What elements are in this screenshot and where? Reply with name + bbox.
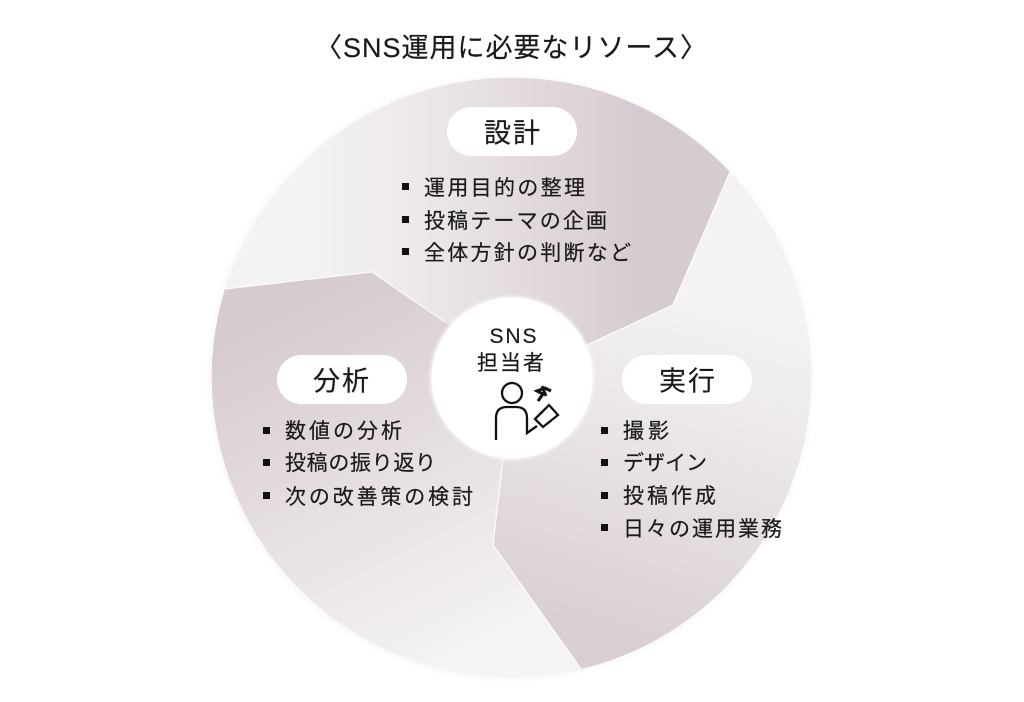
circular diagram bbox=[209, 76, 813, 680]
panel: 設計 bbox=[402, 107, 631, 265]
list: 分析 bbox=[263, 420, 473, 509]
segment dividers bbox=[225, 172, 730, 669]
title: 〈SNS運用に必要なリソース〉 bbox=[315, 33, 707, 63]
pill heading: 実行 bbox=[622, 355, 752, 404]
pill heading: 分析: 分析 bbox=[313, 366, 369, 396]
panel: 実行 bbox=[601, 355, 782, 541]
icon: person with smartphone bbox=[496, 383, 558, 440]
list: 分析: 次の改善策の検討 bbox=[285, 486, 473, 509]
pill heading: 実行: 実行 bbox=[659, 366, 715, 396]
panel: center SNS担当者 bbox=[430, 296, 594, 460]
segment: 分析 bbox=[212, 272, 581, 677]
list: 分析: 投稿の振り返り bbox=[285, 452, 436, 475]
list: 設計: 運用目的の整理 bbox=[424, 177, 585, 200]
panel: 分析 bbox=[263, 355, 473, 509]
list: 実行: 日々の運用業務 bbox=[623, 518, 782, 541]
list: 実行: 撮影 bbox=[623, 420, 669, 443]
list: 設計: 全体方針の判断など bbox=[424, 242, 631, 265]
list: 実行: 投稿作成 bbox=[623, 485, 716, 508]
center label: SNS bbox=[490, 325, 536, 348]
center label: 担当者 bbox=[477, 352, 544, 375]
list: 分析: 数値の分析 bbox=[285, 420, 402, 443]
center label bbox=[477, 325, 544, 375]
list: 実行 bbox=[601, 420, 782, 541]
pill heading: 設計 bbox=[447, 107, 577, 156]
segment: 実行 bbox=[493, 172, 811, 669]
list: 設計: 投稿テーマの企画 bbox=[424, 210, 607, 233]
segment: 設計 bbox=[225, 78, 730, 378]
list: 設計 bbox=[402, 177, 631, 265]
list: 実行: デザイン bbox=[623, 452, 707, 475]
pill heading: 分析 bbox=[277, 355, 407, 404]
pill heading: 設計: 設計 bbox=[484, 118, 540, 148]
